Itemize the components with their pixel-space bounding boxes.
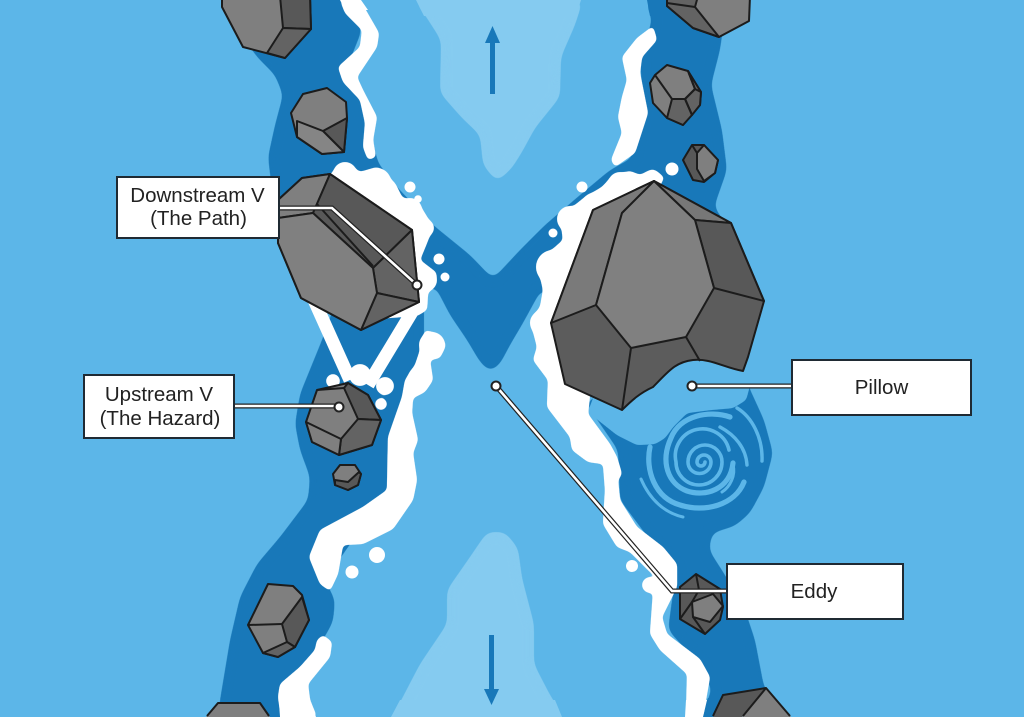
up arrow xyxy=(485,26,500,94)
dark current: lower left channel xyxy=(218,290,424,717)
foam: around pillow boulder and lower right bank xyxy=(530,169,710,717)
boulder: right small xyxy=(683,145,718,182)
foam bubbles: lower left xyxy=(346,547,385,578)
boulder: tiny mid channel xyxy=(333,465,361,490)
boulder: lower left xyxy=(248,584,309,657)
label: Upstream V (The Hazard): (The Hazard) xyxy=(100,407,220,430)
label: Downstream V (The Path): Downstream V xyxy=(130,184,265,207)
label: Pillow xyxy=(792,360,971,415)
leader line: Downstream V xyxy=(278,208,422,290)
foam: lower left bank xyxy=(309,330,446,591)
boulder: upper right xyxy=(650,65,701,125)
boulder: top left xyxy=(222,0,311,58)
foam: around downstream boulder xyxy=(290,162,437,320)
boulder: top right xyxy=(667,0,750,37)
foam: upper left streak xyxy=(338,0,379,160)
label: Downstream V (The Path): (The Path) xyxy=(150,207,247,230)
label: Pillow: Pillow xyxy=(855,376,908,399)
leader line: Pillow xyxy=(688,382,792,390)
foam: bottom left streak xyxy=(278,635,332,717)
light water lobe: bottom xyxy=(389,532,564,717)
foam: white V streaks between boulders xyxy=(314,300,412,385)
label: Upstream V (The Hazard): Upstream V xyxy=(105,383,213,406)
foam: upper right streak xyxy=(611,26,657,167)
foam bubbles: downstream boulder xyxy=(404,182,450,282)
label: Eddy: Eddy xyxy=(791,580,838,603)
light water lobe: top xyxy=(413,0,583,182)
boulder: downstream V xyxy=(278,174,419,330)
leader line: Eddy xyxy=(492,382,727,591)
boulder: pillow boulder xyxy=(551,181,764,410)
dark current: lower right channel with eddy basin xyxy=(585,362,785,717)
label: Downstream V (The Path) xyxy=(117,177,279,238)
dark current: upper channels and central V xyxy=(234,0,745,372)
eddy spiral xyxy=(641,408,762,517)
pillow: raised water behind the boulder xyxy=(588,350,750,445)
leader line: Upstream V xyxy=(234,402,344,412)
down arrow xyxy=(484,635,499,705)
boulder: eddy label xyxy=(680,574,723,634)
label: Upstream V (The Hazard) xyxy=(84,375,234,438)
boulder: bottom right xyxy=(713,688,791,717)
foam bubbles: right side xyxy=(548,162,678,572)
boulder: upstream V xyxy=(306,383,381,455)
boulder: upper left small xyxy=(291,88,347,154)
boulder: bottom left xyxy=(206,703,270,717)
label: Eddy xyxy=(727,564,903,619)
